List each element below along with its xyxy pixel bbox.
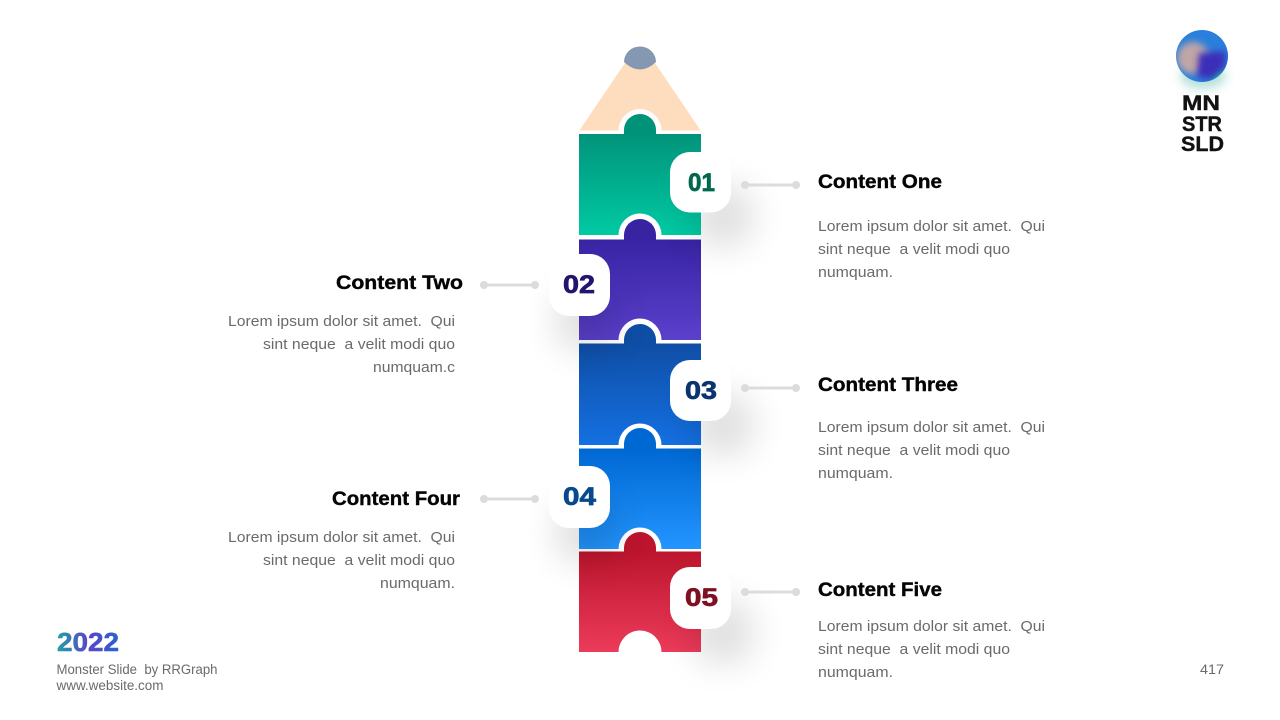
puzzle piece 2 <box>579 214 701 340</box>
connector 04 <box>480 495 539 503</box>
footer credits: Monster Slide by RRGraph <box>56 662 218 677</box>
badge 01: 01 <box>688 169 715 197</box>
pencil tip <box>579 46 701 131</box>
icon: sphere <box>1176 30 1230 89</box>
text block: content four: Content Four <box>332 488 460 510</box>
text block: content two <box>228 272 463 376</box>
text block: content five: Lorem ipsum dolor sit amet. Qui <box>818 618 1045 635</box>
puzzle piece 3 <box>579 319 701 445</box>
text block: content two: numquam.c <box>373 359 456 376</box>
badge 02 <box>549 254 617 350</box>
footer credits <box>56 662 218 693</box>
puzzle piece 5 <box>579 528 701 652</box>
text block: content two: sint neque a velit modi quo <box>263 336 455 353</box>
logo <box>1176 30 1230 156</box>
text block: content one <box>818 171 1045 281</box>
text block: content four: Lorem ipsum dolor sit amet. Qui <box>228 529 455 546</box>
puzzle piece 4 <box>579 424 701 549</box>
connector 03 <box>741 384 800 392</box>
text block: content three: sint neque a velit modi quo <box>818 442 1010 459</box>
text block: content two: Content Two <box>336 272 463 294</box>
badge 04 <box>549 466 617 562</box>
badge 04: 04 <box>563 483 596 511</box>
text block: content three: Lorem ipsum dolor sit amet. Qui <box>818 419 1045 436</box>
wood cone <box>579 60 701 131</box>
logo text: STR <box>1182 113 1222 136</box>
text block: content three <box>818 374 1045 482</box>
graphite lead <box>624 46 656 70</box>
text block: content four: sint neque a velit modi quo <box>263 552 455 569</box>
badge 03 <box>670 360 753 455</box>
text block: content three: numquam. <box>818 465 893 482</box>
logo text: SLD <box>1181 133 1224 156</box>
badge 01 <box>670 152 753 246</box>
connector 02 <box>480 281 539 289</box>
text block: content one: numquam. <box>818 264 893 281</box>
logo text: MN <box>1182 92 1220 115</box>
page number: 417 <box>1200 661 1224 677</box>
text block: content five: sint neque a velit modi quo <box>818 641 1010 658</box>
badge 02: 02 <box>563 271 595 299</box>
logo text <box>1181 92 1224 156</box>
footer credits: www.website.com <box>56 678 164 693</box>
text block: content five <box>818 579 1045 681</box>
text block: content four <box>228 488 460 592</box>
puzzle piece 1 <box>579 109 701 235</box>
badge 03: 03 <box>685 377 717 405</box>
text block: content one: sint neque a velit modi quo <box>818 241 1010 258</box>
badge 05: 05 <box>685 584 718 612</box>
text block: content two: Lorem ipsum dolor sit amet. Qui <box>228 313 455 330</box>
text block: content one: Content One <box>818 171 942 193</box>
text block: content five: numquam. <box>818 664 893 681</box>
text block: content four: numquam. <box>380 575 455 592</box>
text block: content one: Lorem ipsum dolor sit amet. Qui <box>818 218 1045 235</box>
connector 05 <box>741 588 800 596</box>
connector 01 <box>741 181 800 189</box>
badge 05 <box>670 567 753 663</box>
footer year: 2022 <box>57 627 119 657</box>
text block: content five: Content Five <box>818 579 942 601</box>
text block: content three: Content Three <box>818 374 958 396</box>
